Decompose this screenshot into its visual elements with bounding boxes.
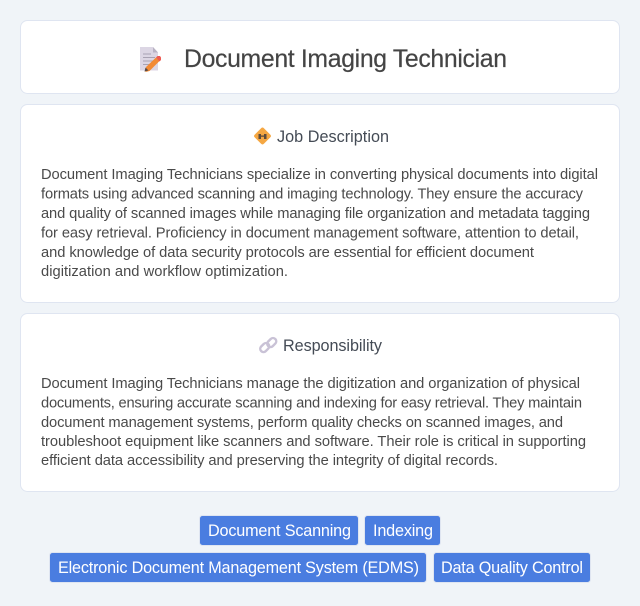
text block: job description: and knowledge of data security protocols are essential for efficient document: [41, 245, 534, 261]
panel: title: [20, 20, 620, 94]
tag: indexing: Indexing: [373, 522, 433, 540]
tag: data quality control: Data Quality Control: [441, 559, 583, 577]
text block: job description: formats using advanced scanning and imaging technology. They ensure the accuracy: [41, 186, 584, 202]
icon: document with pencil: [140, 47, 161, 72]
text block: responsibility: troubleshoot equipment like scanners and software. Their role is critical in supporting: [41, 434, 586, 450]
panel: job description: [20, 104, 620, 302]
text block: job description: [41, 167, 598, 280]
text block: job description: and quality of scanned images while managing file organization and metadata tagging: [41, 206, 590, 222]
tag: edms: Electronic Document Management System (EDMS): [58, 559, 419, 577]
text block: responsibility: document management systems, perform quality checks on scanned images, and: [41, 415, 563, 431]
heading: responsibility: Responsibility: [283, 337, 383, 355]
text block: responsibility: efficient data accessibility and preserving the integrity of digital records.: [41, 453, 498, 469]
panel: responsibility: [20, 314, 620, 492]
text block: job description: digitization and workflow optimization.: [41, 264, 288, 280]
tag: document scanning: [200, 516, 358, 546]
text block: responsibility: Document Imaging Technicians manage the digitization and organization of physical: [41, 376, 580, 392]
tag: edms: [50, 552, 426, 582]
tag: indexing: [364, 516, 440, 546]
icon: chain link: [259, 337, 278, 353]
heading: job description: Job Description: [277, 128, 389, 146]
icon: warning diamond: [253, 127, 272, 145]
text block: responsibility: [41, 376, 586, 469]
text block: job description: Document Imaging Technicians specialize in converting physical documents into digital: [41, 167, 598, 183]
text block: job description: for easy retrieval. Proficiency in document management software, attention to detail,: [41, 226, 579, 242]
title text: Document Imaging Technician: [184, 46, 507, 73]
tag: data quality control: [434, 552, 590, 582]
text block: responsibility: documents, ensuring accurate scanning and indexing for easy retrieval. They maintain: [41, 396, 582, 412]
tags: [50, 516, 590, 582]
tag: document scanning: Document Scanning: [208, 522, 351, 540]
